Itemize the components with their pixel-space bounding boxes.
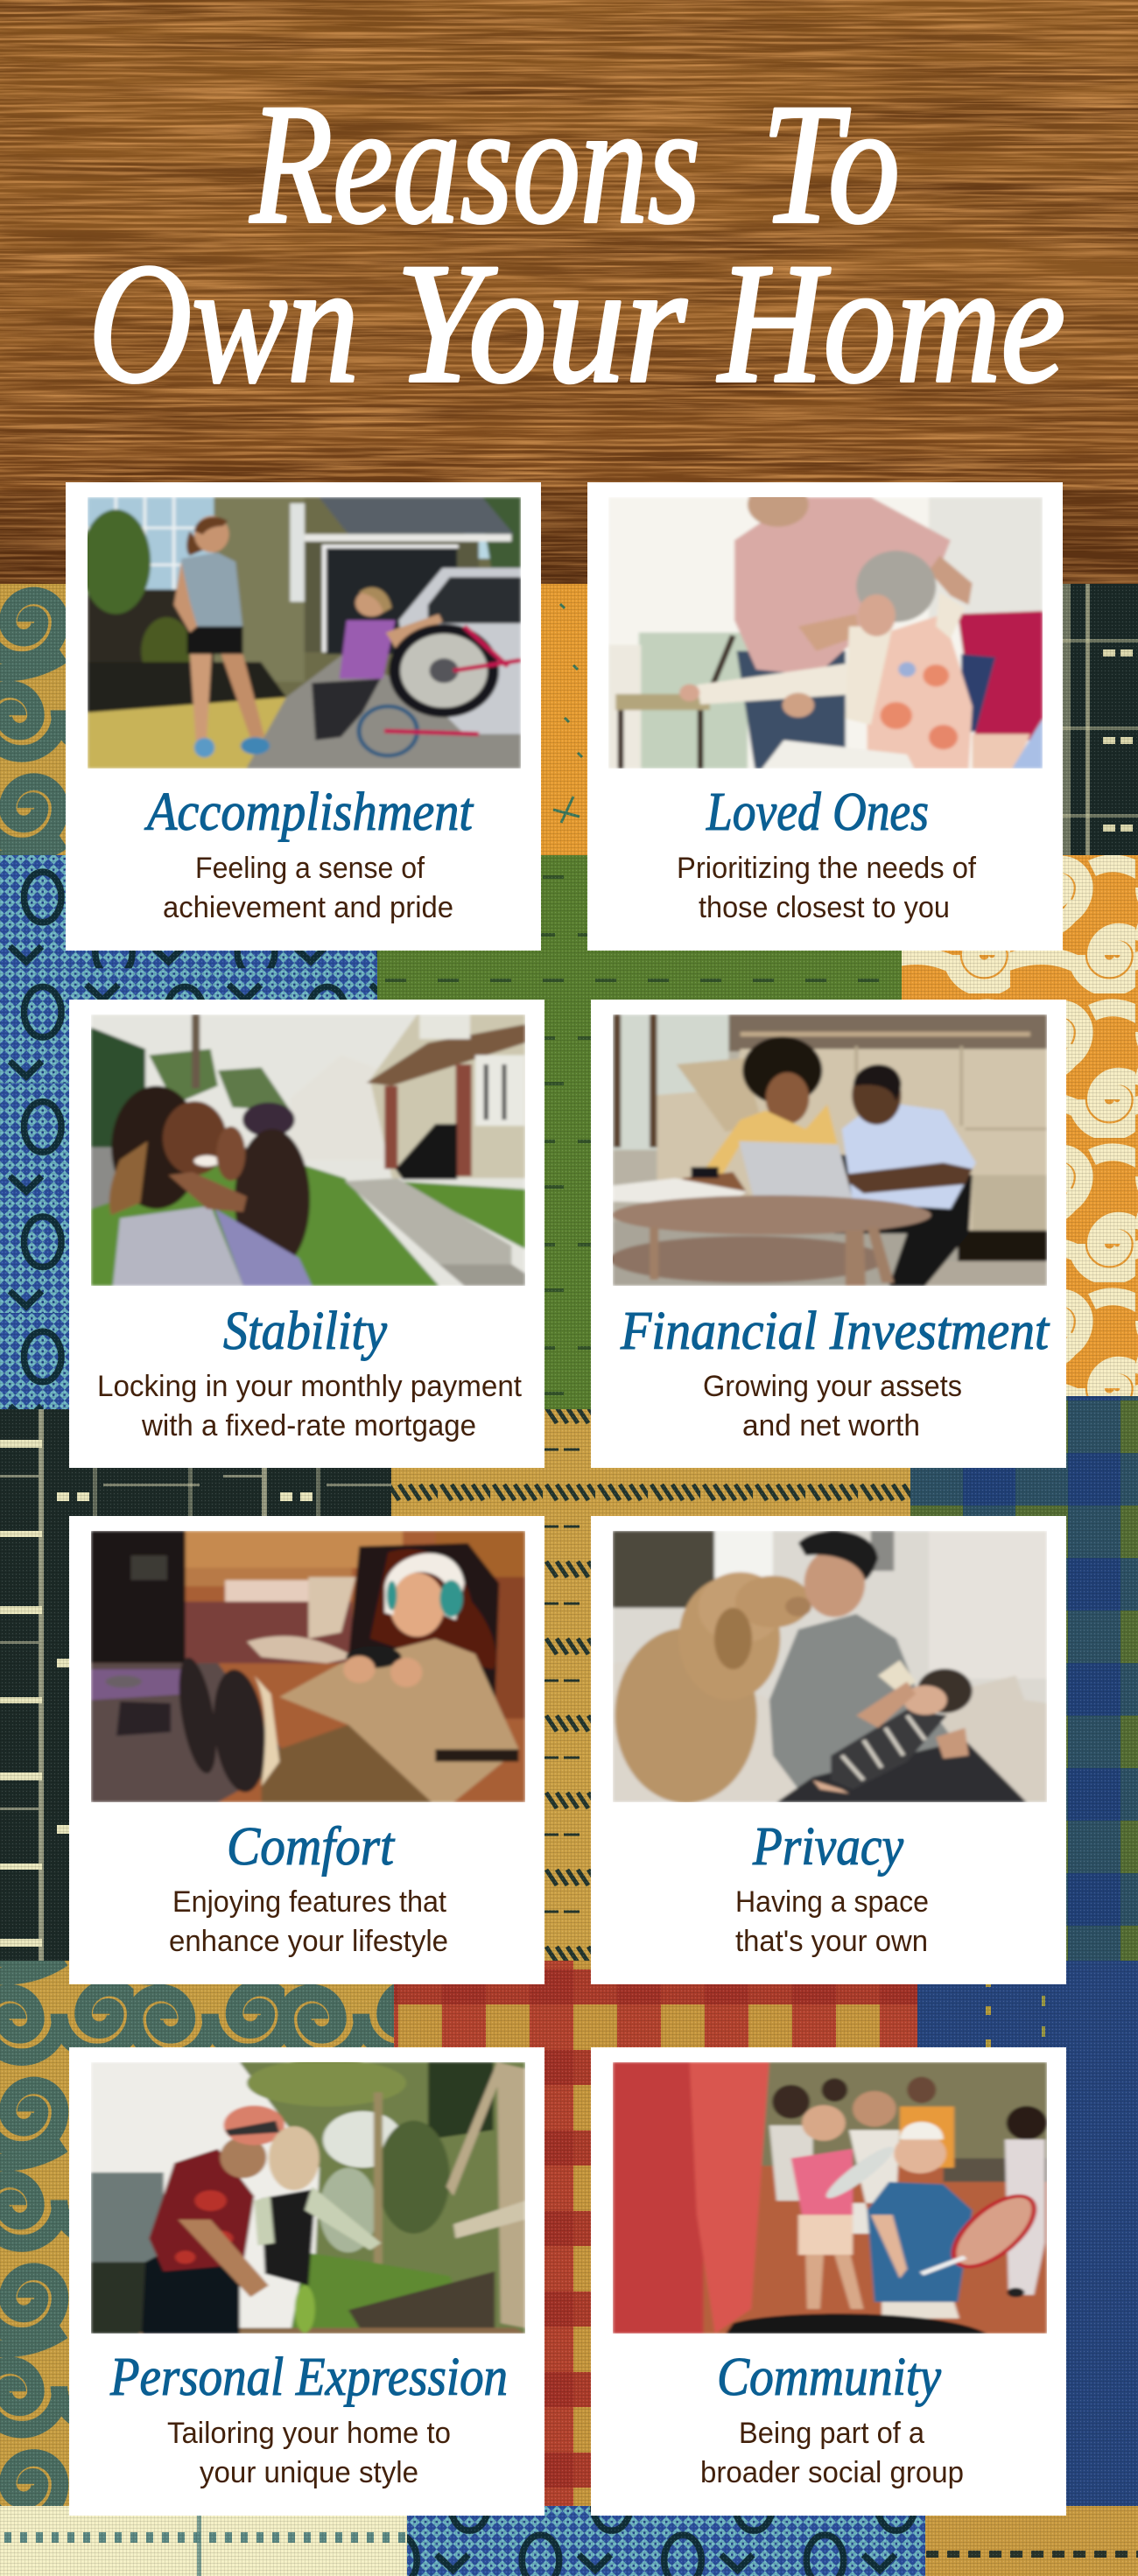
description: financial investment [703,1370,962,1442]
heading: Privacy: Privacy [752,1817,903,1877]
heading: Community: Community [717,2348,941,2407]
description: personal expression: Tailoring your home to [167,2417,451,2450]
title: Own [88,228,359,418]
heading: Accomplishment: Accomplishment [144,783,474,842]
title: To [762,69,900,259]
photo: couple with laptop at coffee table [613,1014,1047,1286]
panel: financial investment card [591,1000,1066,1468]
description: community: broader social group [700,2456,964,2489]
description: financial investment: and net worth [742,1409,920,1442]
description: loved ones: those closest to you [699,891,950,924]
title: Your [396,228,687,418]
description: personal expression [167,2417,451,2489]
heading: Stability: Stability [223,1302,387,1361]
panel: wood plank header background [0,0,1138,585]
description: privacy: that's your own [735,1925,928,1958]
description: community [700,2417,964,2489]
description: privacy: Having a space [735,1885,929,1919]
photo: woman and wheelchair athlete outside house [88,497,521,769]
heading: Loved Ones: Loved Ones [706,783,929,842]
description: community: Being part of a [739,2417,924,2450]
panel: stability card [69,1000,544,1468]
description: stability: Locking in your monthly payment [97,1370,523,1403]
description: accomplishment: Feeling a sense of [195,852,425,885]
panel: comfort card [69,1516,544,1984]
description: comfort [169,1885,448,1958]
panel: patchwork fabric background [0,584,1138,2576]
description: stability: with a fixed-rate mortgage [141,1409,476,1442]
panel: accomplishment card [66,482,541,951]
description: accomplishment [163,852,453,924]
title: Home [716,228,1065,418]
photo: children with tennis rackets on clay court [613,2062,1047,2334]
photo: caregiver helping elderly woman dress [608,497,1043,769]
description: privacy [735,1885,929,1958]
title [88,69,1065,418]
photo: mother and daughter hugging on front lawn [91,1014,525,1286]
description: loved ones [677,852,977,924]
description: loved ones: Prioritizing the needs of [677,852,977,885]
description: comfort: Enjoying features that [172,1885,447,1919]
panel: privacy card [591,1516,1066,1984]
heading: Personal Expression: Personal Expression [109,2348,508,2407]
description: financial investment: Growing your assets [703,1370,962,1403]
description: personal expression: your unique style [200,2456,418,2489]
photo: father feeding baby beside dog [613,1531,1047,1802]
photo: two women gardening in raised bed [91,2062,525,2334]
panel: loved ones card [587,482,1063,951]
description: accomplishment: achievement and pride [163,891,453,924]
heading: Financial Investment: Financial Investment [620,1302,1050,1361]
photo: woman gaming with feet on desk [91,1531,525,1802]
panel: community card [591,2047,1066,2516]
panel: personal expression card [69,2047,544,2516]
description: stability [97,1370,523,1442]
title: Reasons [249,69,700,259]
heading: Comfort: Comfort [227,1817,396,1877]
description: comfort: enhance your lifestyle [169,1925,448,1958]
